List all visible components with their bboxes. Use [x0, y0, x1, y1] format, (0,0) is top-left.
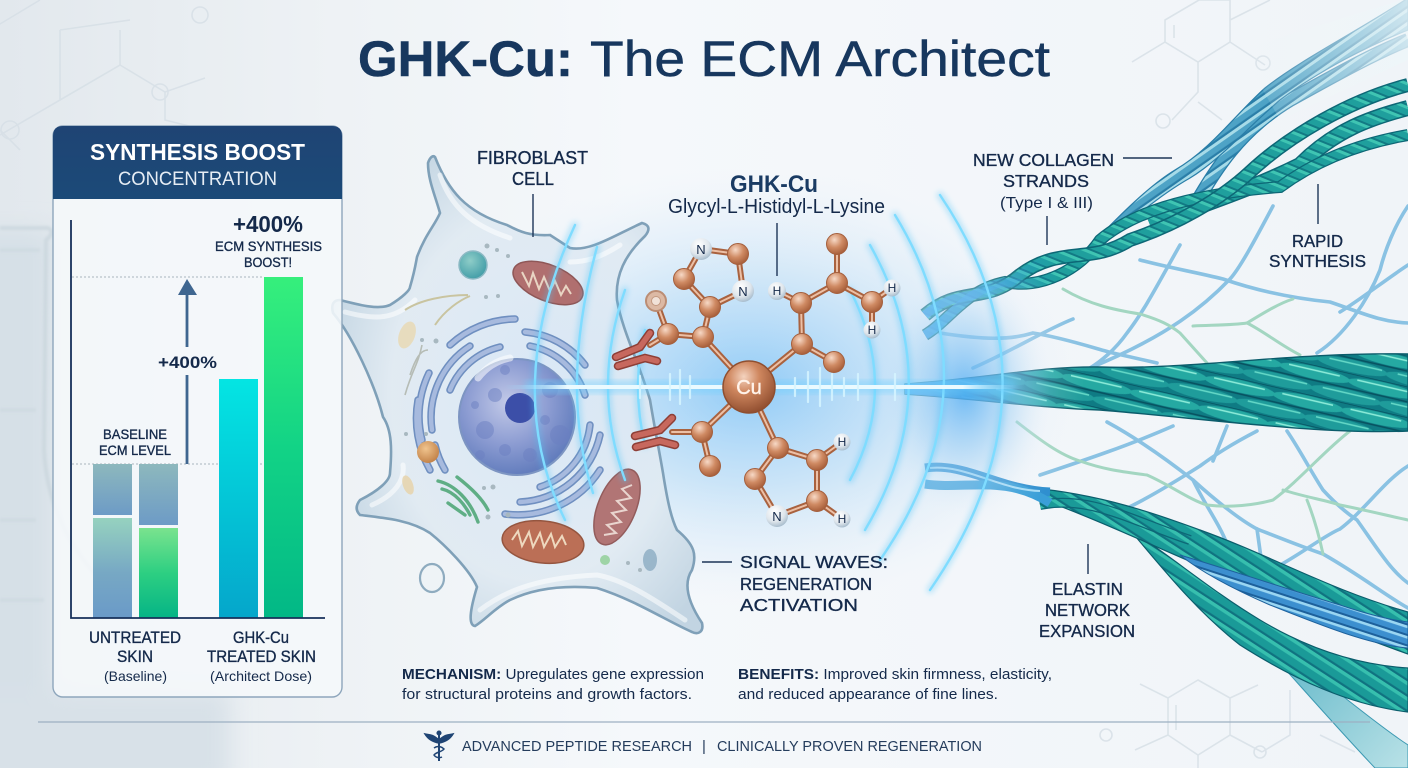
footer text: CLINICALLY PROVEN REGENERATION: [717, 738, 982, 755]
signal beam: [505, 368, 1025, 406]
label: signal waves: [740, 552, 888, 615]
text block: mechanism: for structural proteins and growth factors.: [402, 686, 692, 703]
label: ECM synthesis boost: BOOST!: [244, 254, 292, 270]
bar: untreated right: [139, 464, 178, 618]
label: elastin network expansion: EXPANSION: [1039, 621, 1135, 641]
label: baseline ECM level: [99, 426, 171, 458]
nitrogen atom: N: [696, 242, 706, 257]
footer divider: [38, 721, 1370, 723]
footer text: |: [702, 738, 706, 755]
label: new collagen strands: [973, 150, 1114, 212]
text block: benefits: BENEFITS: Improved skin firmness, elasticity,: [738, 666, 1052, 683]
collagen strand: upper blue bundle: [1093, 0, 1408, 248]
copper atom: Cu: [736, 377, 762, 399]
axis label: untreated: SKIN: [117, 648, 153, 666]
label: full peptide name: Glycyl-L-Histidyl-L-Lysine: [668, 196, 885, 218]
panel header: [53, 126, 342, 199]
hydrogen atoms: H: [868, 323, 876, 337]
mitochondrion right: [584, 463, 650, 551]
text block: benefits: and reduced appearance of fine lines.: [738, 686, 998, 703]
organelle: green golgi: [438, 477, 488, 522]
label: ECM synthesis boost: [215, 238, 322, 270]
collagen strand: upper teal twisted rope: [925, 85, 1408, 335]
GHK-Cu molecule: [646, 234, 900, 528]
label: new collagen strands: (Type I & III): [1000, 195, 1093, 212]
label: signal waves: REGENERATION: [740, 574, 872, 594]
panel heading: SYNTHESIS BOOST: [90, 139, 305, 165]
network: pale green fibres: [1017, 289, 1408, 554]
axis label: untreated: (Baseline): [104, 668, 167, 684]
axis label: treated: (Architect Dose): [210, 668, 312, 684]
detached vesicle: [420, 564, 444, 592]
blue signal glow: [415, 167, 1085, 607]
label: +400% on arrow: +400%: [158, 353, 217, 372]
label: +400% headline: +400%: [233, 211, 303, 237]
bar chart: [71, 220, 325, 618]
label: elastin network expansion: [1039, 579, 1135, 641]
hydrogen atoms: [768, 280, 900, 528]
background: glass beaker: [0, 228, 230, 768]
title: GHK-Cu:: [358, 31, 573, 87]
text block: benefits: [738, 666, 1052, 703]
text block: mechanism: [402, 666, 704, 703]
label: fibroblast cell: FIBROBLAST: [477, 148, 588, 168]
pale oxygen atom: [646, 291, 666, 311]
receptors: [616, 333, 675, 447]
label: new collagen strands: NEW COLLAGEN: [973, 150, 1114, 170]
nitrogen atom: [766, 505, 788, 527]
label: fibroblast cell: CELL: [512, 169, 554, 189]
nitrogen atom: N: [738, 284, 748, 299]
nucleus: [459, 358, 575, 475]
collagen strand: central thick rope: [905, 354, 1408, 432]
label: elastin network expansion: ELASTIN: [1052, 579, 1123, 599]
endoplasmic reticulum: [416, 319, 600, 515]
label: baseline ECM level: ECM LEVEL: [99, 442, 171, 458]
bar: treated green: [264, 277, 303, 618]
label: rapid synthesis: [1269, 231, 1366, 271]
fibroblast cell: [332, 156, 702, 633]
hydrogen atoms: H: [838, 512, 846, 526]
chart axes: [71, 220, 325, 618]
label: rapid synthesis: RAPID: [1292, 231, 1343, 251]
reference dashed lines: [72, 277, 264, 464]
small vesicles and filaments: [395, 244, 657, 572]
label: new collagen strands: STRANDS: [1003, 171, 1089, 191]
network: light blue fibres: [940, 206, 1408, 608]
hydrogen atoms: H: [888, 281, 896, 295]
mitochondrion bottom: [500, 517, 586, 567]
axis label: treated: [207, 629, 316, 684]
axis label: untreated: [89, 629, 181, 684]
fine elastin network lines: [940, 206, 1408, 608]
organelle: teal vesicle: [459, 251, 487, 279]
organelle: orange vesicle: [417, 441, 439, 463]
molecule bonds: [650, 244, 892, 519]
panel subheading: CONCENTRATION: [118, 168, 277, 190]
label: signal waves: SIGNAL WAVES:: [740, 552, 888, 572]
label: fibroblast cell: [477, 148, 588, 189]
bar: treated cyan: [219, 379, 258, 618]
cell membrane: [332, 156, 702, 633]
signal waves: [505, 195, 1025, 590]
label: rapid synthesis: SYNTHESIS: [1269, 251, 1366, 271]
collagen strand: lower rope bundle: [925, 467, 1408, 768]
label: GHK-Cu heading: GHK-Cu: [730, 171, 818, 198]
footer text: ADVANCED PEPTIDE RESEARCH: [462, 738, 692, 755]
title: The ECM Architect: [590, 31, 1050, 87]
nitrogen atom: N: [772, 509, 782, 524]
axis label: treated: GHK-Cu: [233, 629, 289, 647]
bar: untreated left: [93, 464, 132, 618]
label: baseline ECM level: BASELINE: [103, 426, 167, 442]
icon: caduceus: [425, 731, 453, 761]
label: signal waves: ACTIVATION: [740, 595, 858, 615]
copper atom: [723, 361, 775, 413]
panel: synthesis boost chart: [53, 126, 342, 697]
label: elastin network expansion: NETWORK: [1045, 600, 1130, 620]
mitochondrion upper: [507, 252, 589, 314]
nitrogen atom: [690, 238, 712, 260]
leader lines: [533, 158, 1318, 574]
hydrogen atoms: H: [773, 284, 781, 298]
panel card: [53, 126, 342, 697]
text block: mechanism: MECHANISM: Upregulates gene expression: [402, 666, 704, 683]
carbon atoms: [658, 234, 882, 512]
axis label: treated: TREATED SKIN: [207, 648, 316, 666]
membrane inner sheen: [345, 175, 685, 620]
increase arrow: [178, 279, 197, 464]
nitrogen atom: [732, 280, 754, 302]
hydrogen atoms: H: [838, 435, 846, 449]
label: ECM synthesis boost: ECM SYNTHESIS: [215, 238, 322, 254]
axis label: untreated: UNTREATED: [89, 629, 181, 647]
